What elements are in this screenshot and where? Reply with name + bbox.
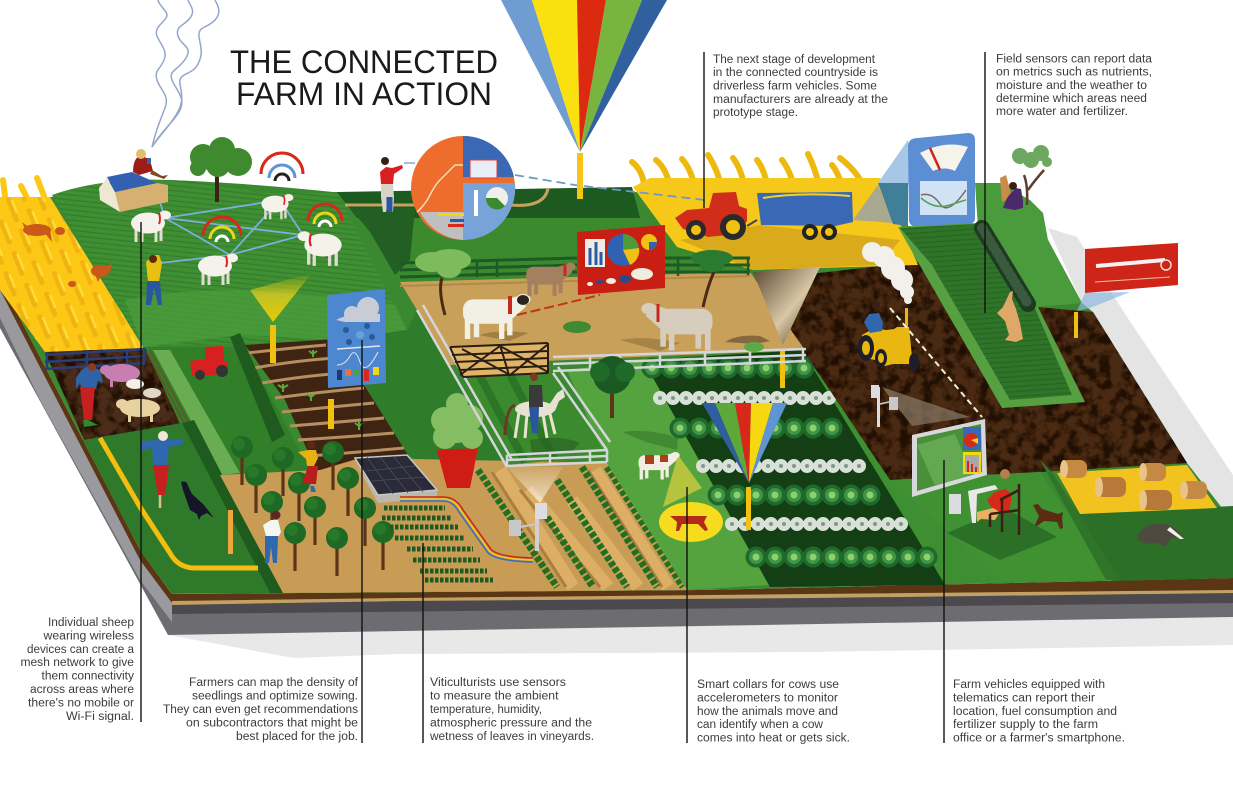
white paddock fences — [417, 305, 806, 467]
tractor smoke — [862, 242, 914, 304]
leader line: cows — [686, 487, 688, 743]
sheep: top — [261, 194, 293, 219]
thermometer sign — [1085, 243, 1178, 293]
title: FARM IN ACTION — [236, 76, 492, 112]
leader line: autonomous vehicles — [703, 52, 705, 208]
text: driverless vehicles: manufacturers are already at the — [713, 94, 888, 106]
seedling rows — [382, 508, 493, 580]
text: driverless vehicles — [713, 54, 888, 119]
yellow tractor — [858, 301, 919, 371]
hedges and light lane — [153, 333, 285, 593]
text: driverless vehicles: driverless farm vehicles. Some — [713, 80, 877, 92]
text: field sensors: determine which areas need — [996, 93, 1147, 105]
wheat field top right — [632, 154, 918, 270]
thermometer sign beam — [1077, 292, 1130, 311]
wooden post — [228, 510, 233, 554]
horse and rider — [505, 373, 565, 438]
woman in orchard — [298, 441, 318, 492]
side fence — [147, 350, 188, 425]
soil field — [755, 262, 1187, 480]
text: field sensors: on metrics such as nutrients, — [996, 66, 1152, 78]
pen fence — [45, 348, 145, 370]
dashed data line — [515, 175, 705, 200]
text: smart collars: how the animals move and — [697, 706, 838, 718]
text: vineyards: atmospheric pressure and the — [430, 717, 592, 729]
text: seedlings: seedlings and optimize sowing. — [192, 690, 358, 702]
sensor pole: rainbow — [577, 153, 583, 199]
sensor pole: tilled field — [328, 399, 334, 429]
text: sheep mesh network: mesh network to give — [20, 657, 134, 669]
vine sensor — [509, 503, 547, 551]
badger — [1137, 524, 1184, 547]
green paddock fence — [400, 257, 750, 277]
text: seedlings — [163, 677, 359, 743]
crow — [181, 482, 214, 520]
pig: pink — [100, 364, 140, 387]
text: vineyards: wetness of leaves in vineyards. — [429, 731, 594, 743]
cow collar beam — [663, 455, 702, 507]
solar panel — [355, 455, 437, 503]
text: telematics: Farm vehicles equipped with — [953, 679, 1105, 691]
data dashboard circle — [411, 136, 515, 240]
pig: cream — [116, 399, 160, 422]
hay bales — [1060, 460, 1207, 510]
text: field sensors: Field sensors can report data — [996, 54, 1153, 66]
field: lower hill — [125, 290, 407, 347]
text: driverless vehicles: prototype stage. — [713, 107, 798, 119]
text: driverless vehicles: in the connected countryside is — [713, 67, 878, 79]
wifi arcs: front sheep — [203, 217, 241, 242]
cabbage rows — [652, 368, 930, 557]
dashed telematics line — [890, 308, 982, 417]
field: dark top strip — [337, 187, 753, 282]
brown cow — [526, 263, 576, 296]
strip field — [898, 223, 1085, 408]
sensor pole: soil — [1074, 312, 1078, 338]
mesh network lines — [157, 193, 303, 263]
animals in the wheat — [22, 222, 112, 287]
rabbit — [997, 291, 1023, 342]
brown dog — [1033, 504, 1063, 529]
wifi arcs: top sheep — [261, 153, 303, 181]
yellow cow marker — [659, 502, 723, 542]
title — [230, 44, 498, 112]
signal waves from farmer — [152, 0, 219, 147]
text: seedlings: Farmers can map the density of — [189, 677, 359, 689]
field: green sheep hill — [52, 180, 407, 347]
lower right green field — [890, 460, 1233, 584]
text: seedlings: They can even get recommendations — [163, 704, 358, 716]
text: field sensors: moisture and the weather to — [996, 80, 1147, 92]
farmer on roof — [133, 149, 168, 179]
sensor pole: hill — [270, 325, 276, 363]
seedlings — [278, 350, 363, 430]
field: left green lane — [335, 310, 507, 470]
text: field sensors — [996, 54, 1153, 118]
white piglets — [126, 379, 161, 398]
text: vineyards: Viticulturists use sensors — [430, 677, 566, 689]
soil sensor — [871, 385, 898, 427]
tree beside paddock — [590, 356, 635, 418]
orchard trees — [231, 436, 394, 576]
ground shadow — [168, 228, 1233, 658]
text: sheep mesh network: there's no mobile or — [28, 697, 134, 709]
text: vineyards — [429, 677, 594, 743]
sensor pole: fence corner — [780, 348, 785, 388]
red plant pot — [431, 393, 483, 488]
tilled seedling field — [245, 339, 408, 472]
text: smart collars: comes into heat or gets sick. — [697, 732, 850, 744]
leader line: vineyards — [422, 543, 424, 743]
beam over soil cavity — [753, 267, 820, 345]
tree — [190, 137, 252, 202]
text: smart collars: can identify when a cow — [697, 719, 824, 731]
text: vineyards: to measure the ambient — [430, 690, 559, 702]
hedge — [982, 228, 1028, 304]
green cow strip — [567, 360, 770, 590]
hay field — [1057, 465, 1217, 514]
text: smart collars: Smart collars for cows use — [697, 679, 839, 691]
rainbow beam top — [501, 0, 667, 152]
lower-left green field and road — [83, 423, 270, 593]
sheep: front — [198, 254, 238, 285]
text: sheep mesh network: them connectivity — [42, 671, 134, 683]
blue trailer — [747, 192, 853, 240]
sheep: right — [298, 231, 342, 266]
grey beam to meter — [853, 185, 893, 223]
text: vineyards: temperature, humidity, — [430, 704, 542, 716]
paddock tree right — [691, 250, 733, 307]
vineyard rows — [478, 467, 692, 587]
leader line: sheep — [140, 222, 142, 722]
red dashed collar line — [517, 295, 600, 315]
text: sheep mesh network: Wi-Fi signal. — [66, 711, 134, 723]
coloured water pipe — [400, 497, 533, 562]
paddock tree left — [415, 249, 471, 315]
vine sensor beam — [507, 467, 563, 503]
text: smart collars — [697, 679, 850, 744]
land slab: side edges — [0, 280, 1233, 635]
text: telematics: telematics can report their — [953, 692, 1095, 704]
text: telematics: fertilizer supply to the farm — [953, 719, 1098, 731]
leader line: telematics — [943, 460, 945, 743]
text: sheep mesh network — [20, 617, 135, 723]
leader line: field sensors — [984, 52, 986, 313]
farmhouse — [99, 172, 168, 212]
man in orchard — [263, 510, 281, 563]
title: THE CONNECTED — [230, 44, 498, 80]
pig pen — [45, 348, 188, 442]
text: telematics: location, fuel consumption and — [953, 706, 1117, 718]
cabbage field — [643, 350, 1000, 587]
sensor beam — [882, 387, 970, 426]
farmer — [76, 363, 103, 427]
land surface base — [0, 180, 1233, 594]
bushes — [563, 321, 764, 352]
text: driverless vehicles: The next stage of development — [713, 54, 876, 66]
wooden gate — [450, 343, 548, 377]
text: telematics — [953, 679, 1125, 744]
white bull — [463, 294, 530, 339]
sheep: left — [131, 210, 171, 242]
text: smart collars: accelerometers to monitor — [697, 692, 838, 704]
man at desk — [968, 469, 1020, 535]
text: telematics: office or a farmer's smartphone. — [953, 732, 1125, 744]
hill right — [975, 183, 1082, 307]
brown and white cow — [638, 452, 680, 480]
weather sign — [327, 289, 386, 388]
wheat field left — [0, 178, 143, 352]
text: field sensors: more water and fertilizer. — [996, 106, 1128, 118]
text: seedlings: on subcontractors that might be — [186, 717, 358, 729]
orchard and vineyard ground — [220, 458, 687, 593]
red tractor small — [190, 346, 228, 380]
paddock ground — [400, 272, 805, 365]
text: sheep mesh network: Individual sheep — [48, 617, 134, 629]
text: seedlings: best placed for the job. — [236, 731, 358, 743]
hill tree — [1012, 145, 1052, 205]
red tractor — [675, 192, 747, 240]
horse paddock — [465, 373, 607, 465]
man with tablet — [380, 157, 415, 212]
woman and kangaroo — [1000, 175, 1023, 210]
monitor screen — [912, 419, 987, 514]
leader line: seedlings — [361, 340, 363, 743]
text: sheep mesh network: devices can create a — [27, 644, 135, 656]
hill sensor beam — [250, 273, 312, 322]
text: sheep mesh network: wearing wireless — [42, 630, 134, 642]
red livestock dashboard — [577, 225, 665, 295]
text: sheep mesh network: across areas where — [30, 684, 134, 696]
farmer with tablet — [146, 255, 162, 305]
wifi arcs: right sheep — [308, 204, 342, 227]
scarecrow — [142, 431, 183, 508]
cabbage bed rainbow beam — [702, 403, 787, 530]
meter sign — [878, 133, 975, 227]
grey cow — [641, 303, 712, 350]
